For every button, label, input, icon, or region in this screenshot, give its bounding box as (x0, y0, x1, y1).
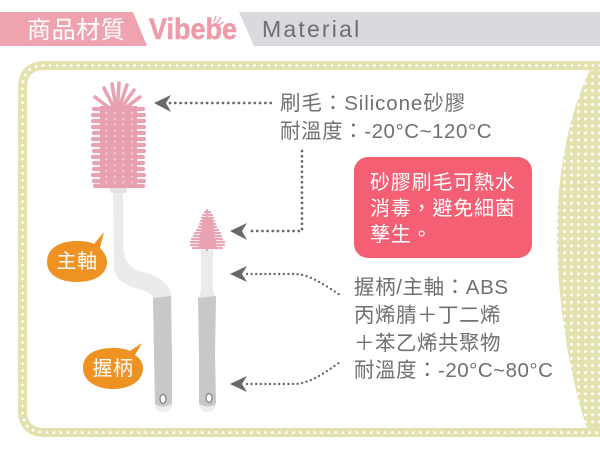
brush stem (113, 188, 172, 300)
header: Vibebe logo: Vibebe (149, 13, 237, 46)
callout: red sterilize note: 消毒，避免細菌 (370, 197, 516, 220)
arrow: to small bristles (230, 151, 302, 240)
header: pink title band (0, 12, 147, 46)
large brush (93, 83, 172, 412)
small brush grip (198, 296, 216, 412)
callout: red sterilize note: 砂膠刷毛可熱水 (370, 171, 516, 194)
header: grey Material band: Material (262, 16, 361, 42)
header: grey Material band (239, 12, 600, 46)
callout: 握柄 (83, 343, 143, 389)
arrow: to stem (230, 266, 340, 295)
text: handle material: ＋苯乙烯共聚物 (354, 332, 501, 355)
text: bristle material: 刷毛：Silicone砂膠 (280, 92, 466, 115)
small grip hole (206, 394, 212, 402)
callout: red sterilize note (354, 157, 532, 258)
brush collar (110, 186, 127, 193)
small grip bottom cap (199, 404, 216, 412)
arrow: to large bristles (154, 95, 271, 112)
callout: 握柄: 握柄 (92, 357, 134, 380)
text: handle material (354, 276, 553, 382)
text: bristle material: 耐溫度：-20°C~120°C (280, 120, 492, 143)
bristle highlights (102, 108, 136, 186)
text: handle material: 耐溫度：-20°C~80°C (354, 359, 553, 382)
small brush (191, 210, 224, 412)
small brush stem (198, 250, 216, 298)
text: handle material: 握柄/主軸：ABS (354, 276, 509, 299)
brush grip (153, 296, 172, 412)
bristle head (93, 83, 144, 188)
text: bristle material (280, 92, 492, 143)
text: handle material: 丙烯腈＋丁二烯 (354, 304, 501, 327)
grip bottom cap (155, 404, 171, 412)
arrow: to grip (230, 362, 340, 392)
callout: red sterilize note: 孳生。 (370, 223, 432, 246)
grip hole (160, 394, 166, 404)
panel: dotted frame (22, 66, 600, 432)
small bristle head (191, 210, 224, 250)
header: pink title band: 商品材質 (27, 17, 125, 44)
callout: 主軸 (47, 232, 107, 282)
callout: 主軸: 主軸 (56, 250, 98, 273)
